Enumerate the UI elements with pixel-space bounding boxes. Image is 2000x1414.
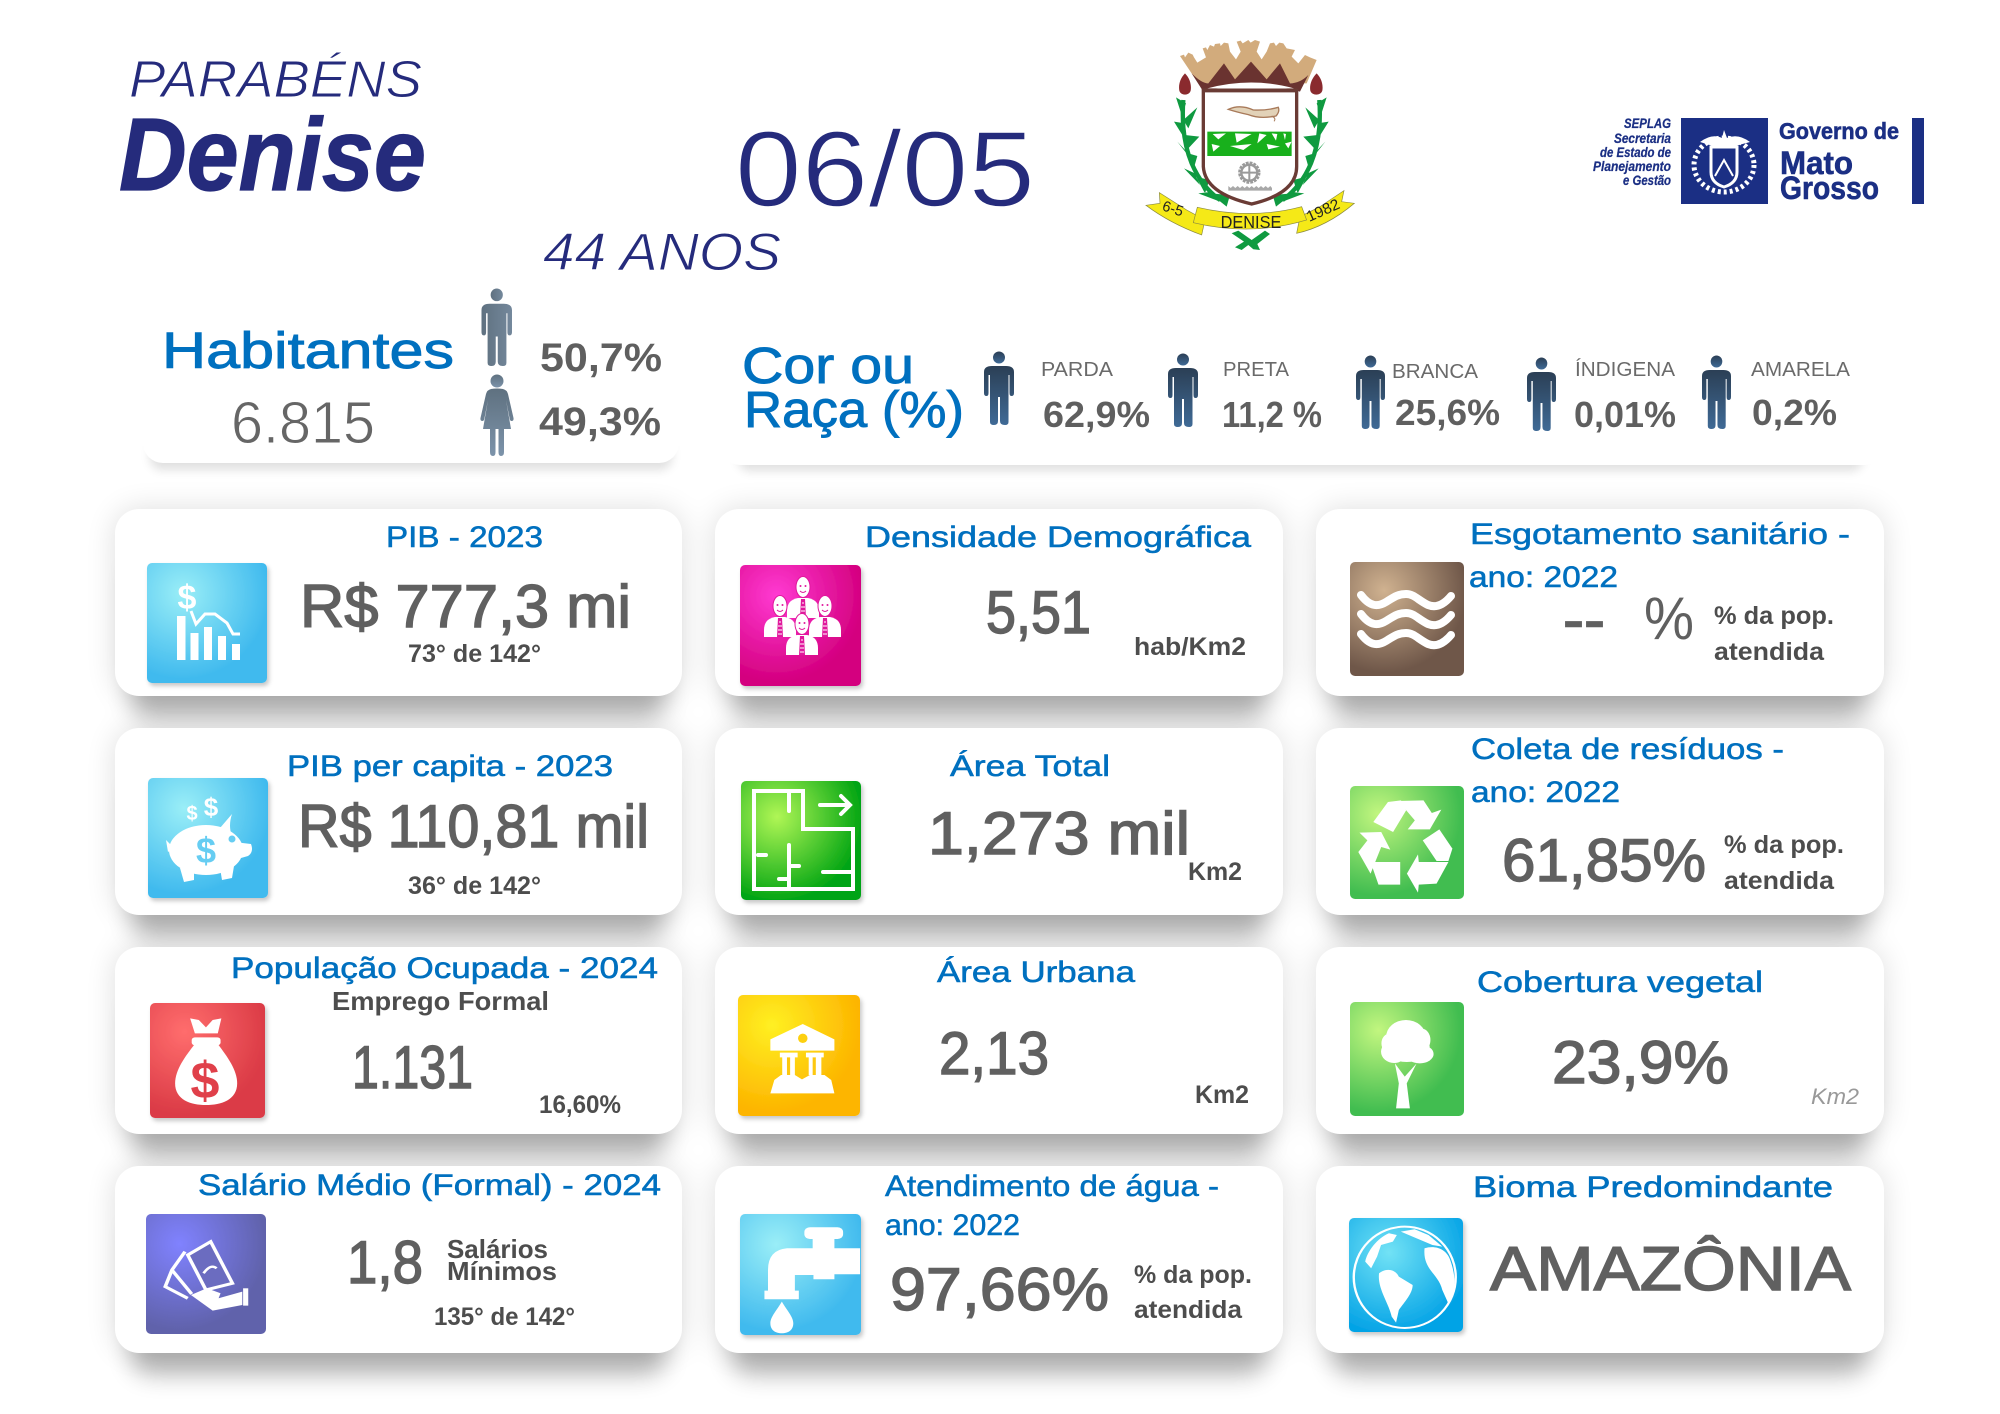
race: preta: 11,2 %: [1222, 394, 1322, 435]
value: 1.131: [352, 1034, 473, 1101]
race: branca: [1356, 356, 1500, 433]
female share: 49,3%: [539, 400, 661, 444]
icon: building: [738, 995, 860, 1116]
logo: SEPLAG Governo de Mato Grosso: Governo de: [1779, 118, 1899, 144]
unit: Km2: [1188, 858, 1242, 886]
logo text: SEPLAG: [1593, 116, 1671, 188]
logo text: SEPLAG: de Estado de: [1600, 145, 1671, 160]
race: indígena: 0,01%: [1574, 394, 1676, 435]
heading: Área Total: [950, 750, 1110, 783]
heading: Salário Médio (Formal) - 2024: [198, 1169, 661, 1202]
logo: SEPLAG Governo de Mato Grosso: Mato: [1780, 145, 1853, 181]
logo text: SEPLAG: Planejamento: [1593, 159, 1671, 174]
race: branca: 25,6%: [1395, 392, 1500, 433]
race: parda: 62,9%: [1043, 394, 1150, 435]
panel: densidade demográfica: [715, 509, 1283, 696]
heading: População Ocupada - 2024: [231, 952, 658, 985]
heading: Denise: Denise: [119, 97, 426, 212]
race: parda: [984, 352, 1150, 435]
percent: 16,60%: [539, 1091, 621, 1119]
panel: esgotamento sanitário: [1316, 509, 1884, 696]
panel: área total: [715, 728, 1283, 915]
unit: Salários: [447, 1234, 548, 1264]
value: R$ 777,3 mi: [300, 573, 631, 640]
value: AMAZÔNIA: [1490, 1235, 1852, 1304]
ranking: 73° de 142°: [408, 640, 541, 668]
heading: PIB - 2023: [386, 521, 543, 554]
coat of arms of Denise: 6-5: [1160, 199, 1185, 220]
unit: % da pop.: [1724, 831, 1844, 859]
heading: Bioma Predomindante: [1473, 1171, 1833, 1204]
value: 5,51: [986, 579, 1091, 646]
unit: atendida: [1134, 1296, 1243, 1324]
logo: SEPLAG Governo de Mato Grosso: Grosso: [1780, 170, 1879, 206]
value: --: [1563, 586, 1605, 653]
heading: Esgotamento sanitário -: [1470, 518, 1850, 551]
logo text: SEPLAG: SEPLAG: [1624, 116, 1671, 131]
logo: SEPLAG Governo de Mato Grosso: [1593, 116, 1924, 206]
heading: Parabéns: PARABÉNS: [129, 51, 422, 109]
date: 06/05: [735, 108, 1035, 229]
unit: atendida: [1714, 638, 1825, 666]
heading: [1471, 733, 1784, 809]
unit: atendida: [1724, 867, 1835, 895]
unit: [1714, 602, 1834, 666]
icon: hand with money: [146, 1214, 266, 1334]
panel: salário médio: [115, 1166, 682, 1353]
icon: people: [740, 565, 861, 686]
age: 44 ANOS: [543, 223, 781, 282]
unit: Km2: [1811, 1084, 1859, 1109]
value: 97,66%: [890, 1256, 1109, 1323]
panel: bioma: [1316, 1166, 1884, 1353]
male share: 50,7%: [540, 336, 662, 380]
unit: % da pop.: [1714, 602, 1834, 630]
race: amarela: [1702, 356, 1851, 433]
heading: ano: 2022: [1469, 561, 1618, 594]
ranking: 36° de 142°: [408, 872, 541, 900]
race: parda: PARDA: [1041, 359, 1114, 381]
heading: PIB per capita - 2023: [287, 750, 613, 783]
panel: coleta de resíduos: [1316, 728, 1884, 915]
icon: water tap: [740, 1214, 861, 1335]
race: amarela: AMARELA: [1751, 359, 1851, 381]
heading: Cor ou Raça: [742, 337, 964, 438]
unit: hab/Km2: [1134, 633, 1246, 661]
icon: bar chart with dollar: $: [178, 579, 197, 617]
icon: money bag: $: [191, 1052, 220, 1110]
value: R$ 110,81 mil: [298, 793, 649, 860]
icon: globe: [1349, 1218, 1463, 1332]
heading: [1469, 518, 1850, 594]
coat of arms of Denise: DENISE: [1221, 212, 1281, 232]
value: [1563, 585, 1694, 653]
panel: cor ou raça: [722, 322, 1883, 465]
ranking: 135° de 142°: [434, 1303, 575, 1331]
heading: Coleta de resíduos -: [1471, 733, 1784, 766]
population value: 6.815: [231, 390, 375, 456]
logo text: SEPLAG: e Gestão: [1623, 173, 1671, 188]
value: 1,8: [347, 1229, 423, 1296]
heading: ano: 2022: [1471, 776, 1620, 809]
race: indígena: [1527, 358, 1676, 435]
subheading: Emprego Formal: [332, 986, 549, 1016]
icon: waves: [1350, 562, 1464, 676]
race: amarela: 0,2%: [1752, 392, 1837, 433]
unit: % da pop.: [1134, 1261, 1252, 1289]
icon: piggy bank: [148, 778, 268, 898]
heading: Cor ou Raça: Raça (%): [744, 381, 964, 438]
panel: PIB: [115, 509, 682, 696]
heading: Área Urbana: [937, 956, 1135, 989]
panel: cobertura vegetal: [1316, 947, 1884, 1134]
coat of arms of Denise: [1146, 40, 1354, 250]
icon: male: [482, 289, 512, 366]
panel: atendimento de água: [715, 1166, 1283, 1353]
icon: recycling: [1350, 786, 1464, 899]
heading: Densidade Demográfica: [865, 521, 1251, 554]
heading: Cor ou Raça: Cor ou: [742, 337, 914, 394]
heading: Atendimento de água -: [885, 1170, 1219, 1203]
panel: área urbana: [715, 947, 1283, 1134]
panel: PIB per capita: [115, 728, 682, 915]
value: 2,13: [939, 1020, 1049, 1087]
icon: piggy bank: $: [196, 830, 216, 871]
race: indígena: ÍNDIGENA: [1575, 358, 1676, 381]
race: branca: BRANCA: [1392, 361, 1479, 383]
heading: Cobertura vegetal: [1477, 966, 1763, 999]
icon: female: [480, 374, 514, 456]
heading: ano: 2022: [885, 1209, 1020, 1242]
heading: Habitantes: Habitantes: [162, 322, 454, 379]
value: 23,9%: [1552, 1029, 1729, 1096]
heading: [885, 1170, 1219, 1242]
race: preta: [1168, 354, 1322, 435]
coat of arms of Denise: 1982: [1304, 196, 1343, 226]
unit: Km2: [1195, 1081, 1249, 1109]
icon: piggy bank: $: [186, 803, 198, 825]
unit: Mínimos: [447, 1256, 557, 1286]
unit: [447, 1234, 557, 1286]
unit: [1724, 831, 1844, 895]
icon: money bag: [150, 1003, 265, 1118]
value: 61,85%: [1502, 827, 1706, 894]
race: preta: PRETA: [1223, 359, 1290, 381]
panel: habitantes: [143, 289, 679, 463]
value: %: [1644, 585, 1694, 652]
icon: bar chart with dollar: [147, 563, 267, 683]
icon: piggy bank: $: [204, 792, 219, 822]
value: 1,273 mil: [928, 800, 1190, 867]
panel: população ocupada: [115, 947, 682, 1134]
logo text: SEPLAG: Secretaria: [1614, 131, 1671, 146]
icon: floor plan: [741, 781, 861, 900]
icon: tree: [1350, 1002, 1464, 1116]
unit: [1134, 1261, 1252, 1324]
